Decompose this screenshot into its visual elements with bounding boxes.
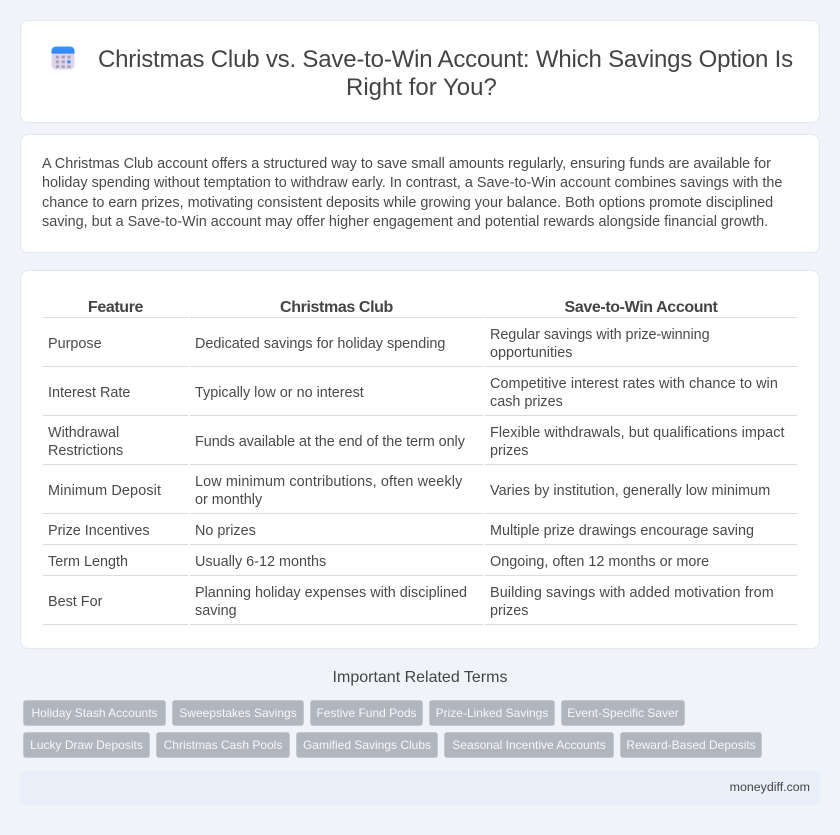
row: Interest Rate: cash prizes bbox=[490, 394, 563, 410]
footer credit: moneydiff.com bbox=[730, 780, 810, 794]
row: Best For bbox=[43, 585, 797, 625]
row: Minimum Deposit bbox=[43, 474, 797, 514]
tag bbox=[156, 732, 290, 758]
row: Withdrawal Restrictions: Funds available at the end of the term only bbox=[195, 434, 465, 450]
panel: comparison table bbox=[20, 270, 820, 649]
row: Purpose bbox=[43, 327, 797, 367]
tag: Gamified Savings Clubs bbox=[303, 738, 431, 752]
intro text bbox=[42, 156, 782, 230]
row: Prize Incentives bbox=[43, 523, 797, 545]
tag: Event-Specific Saver bbox=[567, 706, 679, 720]
related term tags bbox=[23, 700, 762, 758]
table header: Christmas Club bbox=[280, 299, 393, 316]
row: Interest Rate: Competitive interest rates with chance to win bbox=[490, 376, 778, 392]
row: Purpose: opportunities bbox=[490, 345, 572, 361]
tag bbox=[23, 732, 150, 758]
table header: Feature bbox=[88, 299, 143, 316]
panel: header bbox=[20, 20, 820, 123]
row: Withdrawal Restrictions: Withdrawal bbox=[48, 425, 119, 441]
tag bbox=[444, 732, 614, 758]
row: Prize Incentives: Multiple prize drawings encourage saving bbox=[490, 523, 754, 539]
row: Minimum Deposit: Varies by institution, generally low minimum bbox=[490, 483, 770, 499]
row: Interest Rate: Interest Rate bbox=[48, 385, 130, 401]
title: Right for You? bbox=[346, 74, 497, 101]
row: Interest Rate bbox=[43, 376, 797, 416]
tag bbox=[23, 700, 166, 726]
row: Term Length: Term Length bbox=[48, 554, 128, 570]
tag: Lucky Draw Deposits bbox=[30, 738, 143, 752]
tag: Prize-Linked Savings bbox=[436, 706, 548, 720]
intro text: A Christmas Club account offers a structured way to save small amounts regularly, ensuring funds are available for bbox=[42, 156, 771, 172]
title bbox=[98, 46, 793, 101]
row: Purpose: Purpose bbox=[48, 336, 102, 352]
row: Withdrawal Restrictions: prizes bbox=[490, 443, 528, 459]
row: Minimum Deposit: or monthly bbox=[195, 492, 262, 508]
tag bbox=[620, 732, 762, 758]
row: Withdrawal Restrictions: Restrictions bbox=[48, 443, 123, 459]
row: Withdrawal Restrictions: Flexible withdrawals, but qualifications impact bbox=[490, 425, 785, 441]
tag: Christmas Cash Pools bbox=[164, 738, 282, 752]
tag: Sweepstakes Savings bbox=[179, 706, 297, 720]
tag bbox=[172, 700, 304, 726]
intro text: holiday spending without temptation to withdraw early. In contrast, a Save-to-Win account combines savings with the bbox=[42, 175, 782, 191]
row: Purpose: Regular savings with prize-winning bbox=[490, 327, 710, 343]
row: Best For: saving bbox=[195, 603, 237, 619]
icon: calendar bbox=[51, 46, 75, 70]
table header: Save-to-Win Account bbox=[565, 299, 717, 316]
heading: important related terms: Important Related Terms bbox=[333, 669, 507, 686]
intro text: saving, but a Save-to-Win account may offer higher engagement and potential rewards alongside financial growth. bbox=[42, 214, 768, 230]
row: Term Length bbox=[43, 554, 797, 576]
row: Best For: Building savings with added motivation from bbox=[490, 585, 774, 601]
panel: introduction bbox=[20, 134, 820, 253]
table header bbox=[43, 299, 797, 318]
row: Minimum Deposit: Low minimum contributions, often weekly bbox=[195, 474, 462, 490]
row: Prize Incentives: No prizes bbox=[195, 523, 256, 539]
row: Best For: Best For bbox=[48, 594, 102, 610]
row: Withdrawal Restrictions bbox=[43, 425, 797, 465]
tag bbox=[296, 732, 438, 758]
tag bbox=[561, 700, 685, 726]
tag: Reward-Based Deposits bbox=[626, 738, 756, 752]
row: Purpose: Dedicated savings for holiday spending bbox=[195, 336, 445, 352]
tag: Seasonal Incentive Accounts bbox=[452, 738, 606, 752]
title: Christmas Club vs. Save-to-Win Account: Which Savings Option Is bbox=[98, 46, 793, 73]
tag: Festive Fund Pods bbox=[316, 706, 417, 720]
row: Interest Rate: Typically low or no interest bbox=[195, 385, 364, 401]
row: Prize Incentives: Prize Incentives bbox=[48, 523, 150, 539]
row: Term Length: Usually 6-12 months bbox=[195, 554, 326, 570]
tag: Holiday Stash Accounts bbox=[31, 706, 158, 720]
row: Term Length: Ongoing, often 12 months or more bbox=[490, 554, 709, 570]
row: Best For: Planning holiday expenses with disciplined bbox=[195, 585, 467, 601]
row: Minimum Deposit: Minimum Deposit bbox=[48, 483, 161, 499]
row: Best For: prizes bbox=[490, 603, 528, 619]
intro text: chance to earn prizes, motivating consistent deposits while growing your balance. Both options promote disciplined bbox=[42, 195, 773, 211]
tag bbox=[310, 700, 423, 726]
footer band bbox=[20, 771, 820, 805]
tag bbox=[429, 700, 555, 726]
